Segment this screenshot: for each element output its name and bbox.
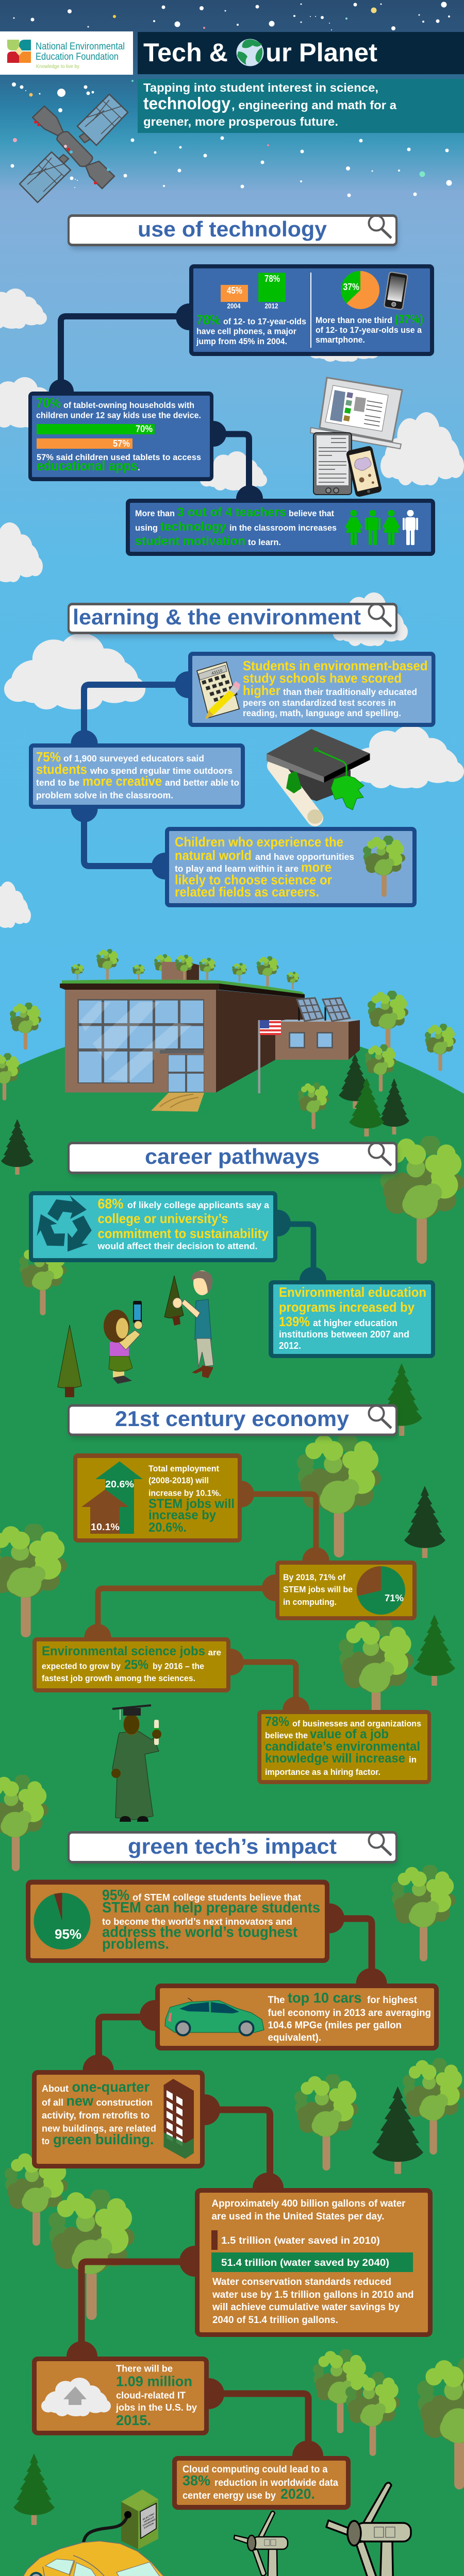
text: 95% of STEM students: to become the world’s next innovators and	[102, 1916, 292, 1927]
text: 78% cell phones	[196, 312, 306, 346]
text: scored higher: peers on standardized test scores in	[243, 698, 396, 708]
search bar: use of technology	[68, 214, 398, 249]
stars	[10, 2, 452, 197]
text: 78% cell phones: of 12- to 17-year-olds	[223, 316, 306, 327]
text: conservation standards: will achieve cumulative water savings by	[212, 2302, 400, 2313]
title	[143, 38, 377, 67]
pie chart: smartphone use	[341, 271, 379, 309]
panel: educators and the outdoors: tend to be	[36, 777, 79, 788]
icon: laptop	[310, 378, 402, 449]
panel: hiring factor: 78%	[265, 1714, 289, 1729]
panel: educators and the outdoors	[29, 730, 245, 822]
icon: charging station	[84, 2489, 158, 2549]
panel: educators and the outdoors: more creative	[82, 773, 162, 789]
header: intro text panel: Tapping into student interest in science,	[143, 81, 378, 94]
text: one-quarter: of all	[42, 2097, 63, 2108]
panel: hiring factor: knowledge will increase	[265, 1751, 405, 1766]
text: 3 out of 4 teachers: to learn.	[248, 537, 281, 547]
panel: environmental education programs: programs increased by	[279, 1299, 415, 1315]
text: 78% cell phones: jump from 45% in 2004.	[196, 336, 287, 346]
text: 68% applicants	[97, 1196, 269, 1251]
header: logo panel	[0, 31, 133, 75]
clouds	[0, 289, 464, 928]
panel: hiring factor	[257, 1697, 431, 1784]
pie chart: 95%: 95%	[55, 1926, 81, 1942]
building: grass roof	[62, 979, 305, 994]
text: 37% smartphones: More than one third	[316, 315, 392, 325]
connector: green tech	[81, 1919, 372, 2445]
text: 37% smartphones: (37%)	[395, 312, 423, 326]
text: conservation standards	[212, 2277, 413, 2326]
building: front wall	[65, 990, 216, 1092]
search bar: career pathways	[68, 1142, 398, 1177]
text: one-quarter: green building.	[53, 2131, 154, 2147]
panel: children and the natural world	[152, 827, 417, 907]
text: 1.09 million: cloud-related IT	[116, 2391, 186, 2401]
header: intro text panel: , engineering and math for a	[231, 98, 396, 112]
text: conservation standards: 2040 of 51.4 trillion gallons.	[212, 2315, 338, 2326]
text: top 10 cars: equivalent).	[268, 2032, 321, 2043]
title: ur Planet	[266, 38, 377, 67]
pie chart: 71% computing: 71%	[385, 1592, 404, 1603]
text: 70% tablets: 70%	[36, 395, 61, 411]
bar chart: tablets: 70%	[136, 423, 153, 434]
icon: satellite	[20, 94, 128, 202]
pie chart: 95%	[34, 1893, 91, 1950]
text: 78% cell phones: have cell phones, a major	[196, 327, 296, 336]
panel: jobs in computing: STEM jobs will be	[283, 1585, 353, 1594]
panel: environment-based schools	[175, 652, 435, 727]
text: 95% of STEM students: problems.	[102, 1936, 169, 1953]
panel: environmental education programs: 139%	[279, 1314, 310, 1329]
text: 3 out of 4 teachers: student motivation	[135, 534, 245, 548]
icon: phone with map	[345, 445, 383, 498]
text: 3 out of 4 teachers: believe that	[289, 509, 334, 518]
panel: educators and the outdoors: and better able to	[165, 777, 239, 788]
text: 68% applicants: would affect their decision to attend.	[97, 1241, 258, 1251]
text: 68% applicants: of likely college applicants say a	[127, 1200, 269, 1210]
icon: flag and pole	[258, 1020, 281, 1093]
building: roof edge	[60, 984, 219, 990]
icon: calculator and pencil: 43110	[211, 668, 223, 676]
pie chart: 71% computing	[357, 1566, 405, 1615]
search bar: green tech's impact	[68, 1831, 398, 1866]
panel: educators and the outdoors: problem solve in the classroom.	[36, 790, 173, 801]
panel: cell phones and smartphones	[176, 264, 434, 356]
text: one-quarter: activity, from retrofits to	[42, 2110, 150, 2121]
icon: cloud upload	[41, 2378, 111, 2416]
text: scored higher	[243, 658, 428, 718]
text: top 10 cars: top 10 cars	[288, 1990, 362, 2006]
logo text: Knowledge to live by	[36, 63, 80, 70]
bar chart: water saved	[211, 2230, 413, 2272]
building: annex	[275, 1020, 360, 1060]
search bar: green tech's impact: green tech’s impact	[128, 1834, 337, 1858]
text: 78% cell phones: 78%	[196, 312, 221, 328]
text: 95% of STEM students: STEM can help prepare students	[102, 1900, 320, 1916]
text: scored higher: reading, math, language and spelling.	[243, 708, 401, 718]
chart: growth arrows: 20.6%	[105, 1479, 134, 1489]
panel: children and the natural world: likely to choose science or	[175, 872, 332, 887]
panel: environmental science jobs: are	[208, 1648, 221, 1657]
panel: cloud IT jobs	[32, 2341, 224, 2435]
icon: 3 of 4 people	[345, 510, 418, 545]
text: job growth: increase by	[148, 1508, 216, 1522]
icon: recycling arrows	[28, 1195, 100, 1259]
panel: children and the natural world: more	[301, 859, 332, 875]
text: scored higher: Students in environment-based	[243, 658, 428, 673]
panel: top 10 fuel economy cars	[140, 1968, 439, 2050]
text: educational apps: educational apps	[37, 458, 138, 473]
text: one-quarter: new buildings, are related	[42, 2124, 156, 2134]
panel: cloud computing energy: 38%	[183, 2472, 210, 2488]
bar chart: cell phone ownership: 78%	[264, 274, 280, 284]
text: scored higher: higher	[243, 683, 280, 698]
text: one-quarter: new	[66, 2093, 93, 2109]
text: job growth: (2008-2018) will	[148, 1476, 209, 1485]
trees on green roof	[71, 949, 299, 989]
panel: jobs in computing: in computing.	[283, 1597, 337, 1607]
text: 37% smartphones: smartphone.	[316, 335, 365, 345]
text: top 10 cars	[268, 1990, 431, 2043]
sign text: ELECTRIC	[143, 2512, 155, 2521]
text: 70% tablets	[36, 395, 201, 420]
panel: environmental education programs: Environmental education	[279, 1284, 426, 1300]
panel: environmental science jobs: Environmental science jobs	[42, 1644, 205, 1658]
panel: educators and the outdoors: students	[36, 761, 87, 777]
text: job growth: STEM jobs will	[148, 1497, 235, 1511]
text: one-quarter: one-quarter	[72, 2079, 150, 2095]
icon: globe	[236, 39, 264, 66]
text: 3 out of 4 teachers: 3 out of 4 teachers	[177, 505, 286, 519]
panel: hiring factor: importance as a hiring factor.	[265, 1767, 380, 1777]
text: one-quarter: to	[42, 2136, 49, 2146]
text: water use: are used in the United States per day.	[211, 2211, 385, 2222]
school building	[60, 979, 360, 1112]
sign text: VEHICLE	[144, 2515, 154, 2524]
text: conservation standards: water use by 1.5 trillion gallons in 2010 and	[212, 2290, 413, 2300]
panel: jobs in computing: By 2018, 71% of	[283, 1572, 345, 1582]
text: top 10 cars: The	[268, 1995, 285, 2006]
panel: hiring factor: believe the	[265, 1731, 308, 1740]
text: 3 out of 4 teachers: More than	[135, 509, 175, 518]
panel: STEM job growth	[73, 1453, 254, 1543]
text: 3 out of 4 teachers: in the classroom increases	[229, 523, 337, 533]
panel: cloud computing energy: center energy use by	[183, 2490, 276, 2501]
panel: children and the natural world: related fields as careers.	[175, 884, 319, 900]
panel: educators and the outdoors: who spend regular time outdoors	[90, 766, 233, 776]
text: 37% smartphones	[316, 312, 423, 345]
icon: green car	[165, 1998, 264, 2035]
text: 3 out of 4 teachers: technology	[160, 520, 227, 534]
text: job growth: Total employment	[148, 1464, 219, 1473]
icon: large wind turbine	[326, 2483, 411, 2576]
panel: cloud computing energy: reduction in worldwide data	[214, 2478, 338, 2488]
panel: environmental education programs	[269, 1267, 435, 1358]
sign text: STATION	[144, 2522, 154, 2530]
text: 70% tablets: of tablet-owning households with	[63, 400, 194, 410]
panel: children and the natural world: natural world	[175, 848, 252, 863]
panel: environmental education programs: institutions between 2007 and	[279, 1329, 409, 1340]
logo text	[36, 41, 125, 70]
search bar: learning and the environment: learning & the environment	[73, 605, 361, 629]
text: one-quarter: About	[42, 2083, 69, 2094]
icon: tree	[363, 835, 405, 897]
text: top 10 cars: fuel economy in 2013 are averaging	[268, 2008, 431, 2019]
connector: career pathways	[286, 1224, 313, 1270]
header: intro text panel: technology	[143, 94, 231, 113]
text: top 10 cars: 104.6 MPGe (miles per gallon	[268, 2020, 402, 2031]
building: entrance	[151, 1050, 204, 1112]
bar chart: cell phone ownership: 2012	[265, 302, 278, 310]
search bar: 21st century economy: 21st century economy	[115, 1406, 350, 1431]
text: scored higher: study schools have scored	[243, 670, 402, 686]
text: job growth	[148, 1464, 235, 1535]
text: conservation standards: Water conservation standards reduced	[212, 2277, 391, 2287]
icon: foundation logo	[7, 40, 31, 63]
icon: solar panels	[297, 998, 350, 1021]
sign text: CHARGING	[143, 2518, 156, 2528]
panel: green building	[32, 2055, 220, 2168]
text: 3 out of 4 teachers: using	[135, 523, 158, 533]
logo text: National Environmental	[36, 41, 125, 52]
text: one-quarter: construction	[96, 2097, 153, 2108]
panel: environmental science jobs: 25%	[124, 1658, 148, 1672]
hill and ground	[0, 1022, 464, 2576]
text: 70% tablets: children under 12 say kids use the device.	[36, 410, 201, 420]
text: 68% applicants: commitment to sustainability	[98, 1226, 269, 1241]
icon: graduation cap and diploma	[267, 729, 370, 824]
text: water use	[211, 2198, 406, 2222]
title: Tech &	[143, 38, 228, 67]
panel: children and the natural world: and have opportunities	[255, 852, 354, 862]
text: 95% of STEM students: of STEM college students believe that	[132, 1892, 301, 1903]
logo text: Education Foundation	[36, 52, 119, 62]
text: educational apps: .	[138, 463, 140, 472]
bar chart: tablets: 57%	[113, 438, 130, 449]
text: 37% smartphones: of 12- to 17-year-olds use a	[316, 325, 422, 335]
panel: educators and the outdoors: of 1,900 surveyed educators said	[63, 753, 204, 764]
text: 1.09 million: jobs in the U.S. by	[115, 2402, 197, 2413]
bar chart: cell phone ownership: 45%	[227, 285, 242, 296]
search bar: learning and the environment	[68, 603, 398, 638]
panel: tablets	[28, 379, 226, 481]
search bar: use of technology: use of technology	[138, 217, 327, 241]
text: 68% applicants: 68%	[98, 1196, 124, 1212]
panel: college sustainability	[28, 1191, 291, 1262]
text: 1.09 million: 1.09 million	[116, 2373, 192, 2389]
panel: educators and the outdoors: 75%	[36, 749, 61, 765]
connector: use of technology	[61, 316, 249, 487]
building: side wall	[216, 990, 304, 1092]
chart: growth arrows: 10.1%	[91, 1521, 120, 1532]
panel: children and the natural world: to play and learn within it are	[175, 863, 299, 874]
connector: 21st century economy	[98, 1494, 316, 1699]
bar chart: cell phone ownership: 2004	[227, 302, 241, 310]
panel: hiring factor: value of a job	[310, 1727, 389, 1741]
panel: hiring factor: of businesses and organizations	[292, 1719, 421, 1728]
panel: cloud computing energy	[172, 2441, 351, 2510]
text: water use: Approximately 400 billion gallons of water	[211, 2198, 406, 2209]
icon: tall building	[164, 2079, 194, 2159]
text: job growth: increase by 10.1%.	[148, 1488, 221, 1498]
panel: environmental science jobs: expected to grow by	[42, 1661, 121, 1671]
text: top 10 cars: for highest	[367, 1995, 418, 2006]
search bar: career pathways: career pathways	[145, 1144, 320, 1168]
pie chart: smartphone use: 37%	[343, 282, 359, 292]
panel: cloud computing energy: Cloud computing could lead to a	[183, 2464, 328, 2475]
text: scored higher: than their traditionally educated	[283, 687, 417, 697]
icon: smartphone	[384, 272, 408, 310]
panel: STEM prepares students	[26, 1879, 344, 1963]
icon: yellow electric car	[23, 2541, 184, 2576]
text: 95% of STEM students	[102, 1887, 320, 1953]
background: night sky to daytime gradient	[0, 0, 464, 1133]
panel: cloud computing energy: 2020.	[280, 2486, 315, 2502]
building: window grid	[77, 999, 204, 1083]
illustration: graduate	[111, 1705, 161, 1822]
text: 3 out of 4 teachers	[135, 505, 337, 548]
text: 95% of STEM students: 95%	[102, 1887, 129, 1904]
header: title bar	[138, 32, 464, 74]
bar chart: water saved: 51.4 trillion (water saved by 2040)	[221, 2258, 389, 2268]
chart: growth arrows	[81, 1461, 143, 1534]
panel: jobs in computing	[262, 1547, 417, 1620]
text: 1.09 million: 2015.	[116, 2412, 151, 2428]
bar chart: water saved: 1.5 trillion (water saved in 2010)	[221, 2235, 380, 2246]
panel: hiring factor: in	[409, 1755, 417, 1765]
panel: environmental science jobs	[32, 1624, 244, 1692]
panel: water conservation	[179, 2173, 433, 2337]
text: one-quarter	[42, 2079, 156, 2147]
panel: environmental education programs: 2012.	[279, 1340, 301, 1351]
header: intro text panel	[138, 79, 464, 133]
panel: environmental science jobs: fastest job growth among the sciences.	[42, 1673, 195, 1683]
icon: e-reader	[313, 433, 352, 495]
text: 1.09 million	[115, 2364, 197, 2428]
trees and pines on hill	[0, 990, 464, 2576]
illustration: man holding small pine tree	[164, 1270, 213, 1378]
bar chart: cell phone ownership	[221, 273, 286, 310]
icon: calculator and pencil	[197, 662, 240, 719]
text: educational apps: 57% said children used tablets to access	[37, 452, 201, 462]
header: intro text panel: greener, more prosperous future.	[143, 115, 338, 128]
panel: environmental education programs: at higher education	[313, 1317, 397, 1328]
illustration: girl photographing with phone	[58, 1301, 142, 1397]
text: 1.09 million: There will be	[116, 2364, 173, 2374]
panel: children and the natural world: Children who experience the	[175, 834, 343, 850]
text: 68% applicants: college or university’s	[98, 1211, 228, 1226]
text: job growth: 20.6%.	[148, 1520, 187, 1535]
search bar: 21st century economy	[68, 1404, 398, 1439]
connector: learning	[84, 685, 178, 866]
text: educational apps	[37, 452, 201, 473]
icon: small wind turbine	[234, 2511, 288, 2576]
text: 95% of STEM students: address the world’s toughest	[102, 1924, 297, 1940]
panel: hiring factor: candidate’s environmental	[265, 1739, 420, 1754]
bar chart: tablets	[37, 423, 155, 449]
panel: teachers and technology	[126, 485, 435, 556]
panel: environmental science jobs: by 2016 – the	[153, 1661, 204, 1671]
sign text	[143, 2512, 156, 2531]
